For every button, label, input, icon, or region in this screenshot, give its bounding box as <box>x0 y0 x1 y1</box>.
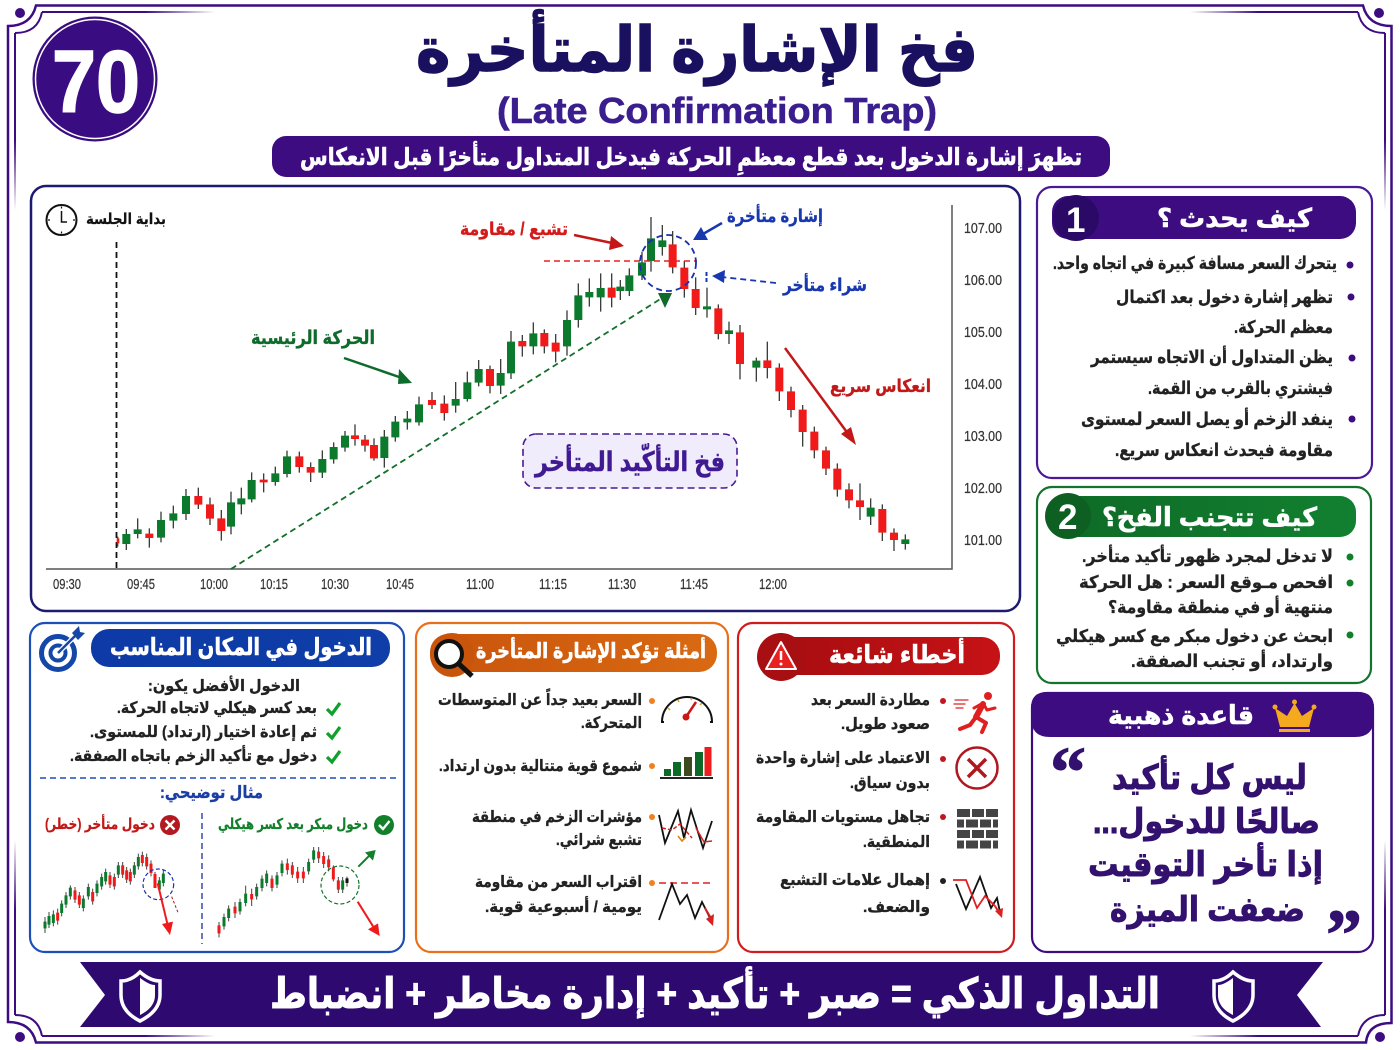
time axis labels: 11:45 <box>680 577 708 593</box>
subtitle: (Late Confirmation Trap) <box>497 90 937 131</box>
icon: magnifier <box>436 641 472 676</box>
icon: left shield <box>121 972 160 1021</box>
quote text: إذا تأخر التوقيت <box>1088 842 1323 885</box>
body text: ابحث عن دخول مبكر مع كسر هيكلي <box>1056 626 1333 647</box>
body text: والضعف. <box>863 899 930 916</box>
candlesticks: peak and reversal <box>533 217 905 551</box>
body text: مطاردة السعر بعد <box>811 692 930 709</box>
time axis labels: 09:30 <box>53 577 81 593</box>
body text: افحص مـوقع السعر : هل الحركة <box>1079 572 1333 593</box>
quote text: ليس كل تأكيد <box>1112 755 1307 797</box>
body text: الاعتماد على إشارة واحدة <box>756 750 930 767</box>
body text <box>1056 545 1333 672</box>
text: best entry: ثم إعادة اختيار (ارتداد) للمستوى. <box>90 724 317 741</box>
time axis labels: 10:15 <box>260 577 288 593</box>
bullets <box>940 698 946 884</box>
header pill: 1 <box>1066 201 1085 240</box>
time axis labels <box>53 577 787 593</box>
mini chart: late entry <box>45 852 178 935</box>
arrow head: trend line <box>658 293 672 308</box>
body text: صعود طويل. <box>841 716 930 733</box>
icon: brick wall <box>957 809 998 848</box>
panel: common mistakes <box>738 623 1014 952</box>
time axis labels: 11:00 <box>466 577 494 593</box>
body text: يومية / أسبوعية قوية. <box>485 896 642 916</box>
time axis labels: 12:00 <box>759 577 787 593</box>
label: session start: بداية الجلسة <box>86 211 166 228</box>
body text: شموع قوية متتالية بدون ارتداد. <box>439 758 642 775</box>
body text: إهمال علامات التشبع <box>780 872 930 889</box>
time axis labels: 11:30 <box>608 577 636 593</box>
resistance line <box>544 260 697 262</box>
price axis labels: 107.00 <box>964 221 1002 237</box>
panel: golden rule <box>1031 692 1374 975</box>
body text <box>756 692 930 916</box>
divider <box>40 777 396 779</box>
body text <box>438 687 642 916</box>
label: main move: الحركة الرئيسية <box>251 328 375 349</box>
icon: runner <box>954 692 995 732</box>
icon: gauge <box>661 697 713 722</box>
time axis labels: 11:15 <box>539 577 567 593</box>
body text: مؤشرات الزخم في منطقة <box>472 809 642 827</box>
definition strip <box>272 136 1110 177</box>
arrow: saturation <box>574 235 624 250</box>
callout: late confirmation trap <box>523 434 737 488</box>
icon: momentum zigzag <box>659 810 712 848</box>
body text: معظم الحركة. <box>1234 317 1333 338</box>
icon: weakening zigzag <box>953 877 1003 918</box>
header pill: أخطاء شائعة <box>829 638 965 669</box>
label: late signal: إشارة متأخرة <box>727 204 823 227</box>
header pill <box>757 633 1000 681</box>
price axis labels: 106.00 <box>964 273 1002 289</box>
label: fast reversal: انعكاس سريع <box>830 376 931 397</box>
price axis labels: 101.00 <box>964 533 1002 549</box>
body text: يتحرك السعر مسافة كبيرة في اتجاه واحد. <box>1053 253 1337 274</box>
body text: تشبع شرائي. <box>556 832 642 850</box>
panel: entering at the right place <box>30 623 404 952</box>
header pill: 2 <box>1058 498 1077 537</box>
panel: examples confirming late signal <box>416 623 728 952</box>
quote text: ضعفت الميزة <box>1110 891 1305 930</box>
subheading: مثال توضيحي: <box>160 783 263 803</box>
trend line <box>231 298 662 569</box>
quote text: صالحًا للدخول... <box>1093 803 1320 842</box>
callout: late confirmation trap: فخ التأكّيد المتأخر <box>533 442 725 478</box>
candlesticks: rising leg <box>118 331 522 550</box>
number badge 70 <box>32 16 158 142</box>
body text: مقاومة فيحدث انعكاس سريع. <box>1115 440 1333 461</box>
panel 2: how to avoid the trap <box>1037 487 1371 683</box>
header <box>1031 692 1374 737</box>
time axis labels: 10:45 <box>386 577 414 593</box>
icon: x circle <box>956 748 998 788</box>
text: best entry: الدخول الأفضل يكون: <box>148 676 300 695</box>
arrow: fast reversal <box>785 348 856 445</box>
quote text <box>1088 755 1323 930</box>
late signal circle <box>640 235 696 291</box>
icons: check marks <box>327 703 340 762</box>
icon: target <box>42 626 85 670</box>
header pill: أمثلة تؤكد الإشارة المتأخرة <box>476 636 706 663</box>
header pill <box>1052 195 1356 241</box>
price axis labels: 103.00 <box>964 429 1002 445</box>
body text: لا تدخل لمجرد ظهور تأكيد متأخر. <box>1082 545 1333 567</box>
arrow: late buy <box>706 270 776 283</box>
body text: المتحركة. <box>581 715 642 732</box>
panel: main candlestick chart <box>31 186 1020 611</box>
body text: ينفد الزخم أو يصل السعر لمستوى <box>1081 408 1333 430</box>
body text: تظهر إشارة دخول بعد اكتمال <box>1116 287 1333 308</box>
body text: تجاهل مستويات المقاومة <box>756 809 930 826</box>
text: best entry: بعد كسر هيكلي لاتجاه الحركة. <box>117 700 317 718</box>
body text: فيشتري بالقرب من القمة. <box>1148 378 1333 399</box>
body text: يظن المتداول أن الاتجاه سيستمر <box>1090 346 1333 368</box>
header pill: كيف يحدث ؟ <box>1157 203 1313 233</box>
body text: المنطقية. <box>863 834 930 851</box>
open quote: “ <box>1050 732 1086 812</box>
body text <box>1053 253 1337 461</box>
price axis labels: 104.00 <box>964 377 1002 393</box>
column divider <box>201 813 203 944</box>
definition strip: تظهرَ إشارة الدخول بعد قطع معظمِ الحركة فيدخل المتداول متأخرًا قبل الانعكاس <box>300 141 1082 176</box>
body text: منتهية أو في منطقة مقاومة؟ <box>1108 596 1333 618</box>
body text: اقتراب السعر من مقاومة <box>475 874 642 891</box>
label: late buy: شراء متأخر <box>782 273 867 296</box>
bullets <box>649 698 655 886</box>
body text: بدون سياق. <box>850 775 930 792</box>
header pill: الدخول في المكان المناسب <box>110 634 372 661</box>
time axis labels: 09:45 <box>127 577 155 593</box>
arrow: late signal <box>693 223 722 240</box>
bullets <box>1346 554 1354 638</box>
price axis labels <box>964 221 1002 549</box>
panel 1: how it happens <box>1037 187 1372 478</box>
text: best entry: دخول مع تأكيد الزخم باتجاه الصفقة. <box>70 745 317 765</box>
header pill <box>430 633 717 677</box>
time axis labels: 10:30 <box>321 577 349 593</box>
label: saturation: تشبع / مقاومة <box>460 219 568 240</box>
bottom banner <box>80 962 1323 1027</box>
session start marker <box>116 242 118 569</box>
title: فخ الإشارة المتأخرة <box>416 9 978 86</box>
number badge 70: 70 <box>52 32 140 131</box>
icon: resistance zigzag <box>659 883 714 926</box>
heading: قاعدة ذهبية <box>1108 700 1254 730</box>
bullets <box>1346 262 1356 422</box>
arrow: main move <box>344 358 412 384</box>
time axis labels: 10:00 <box>200 577 228 593</box>
text: best entry <box>70 676 317 765</box>
body text: وارتداد، أو تجنب الصفقة. <box>1131 650 1333 672</box>
price axis labels: 105.00 <box>964 325 1002 341</box>
icon: clock <box>46 205 76 235</box>
header pill: كيف تتجنب الفخ؟ <box>1102 502 1318 533</box>
label: late entry: دخول متأخر (خطر) <box>45 814 155 833</box>
header pill <box>91 629 390 667</box>
icon: crown <box>1272 700 1316 732</box>
icon: warning <box>766 642 796 669</box>
icon: right shield <box>1214 972 1253 1021</box>
body text: السعر بعيد جداً عن المتوسطات <box>438 687 642 709</box>
mini chart: early entry <box>219 847 380 937</box>
label: early entry: دخول مبكر بعد كسر هيكلي <box>218 816 368 833</box>
banner text: التداول الذكي = صبر + تأكيد + إدارة مخاطر + انضباط <box>270 966 1160 1019</box>
header pill <box>1045 493 1356 539</box>
price axis labels: 102.00 <box>964 481 1002 497</box>
close quote: ” <box>1326 895 1362 975</box>
icon: bars <box>660 747 713 778</box>
